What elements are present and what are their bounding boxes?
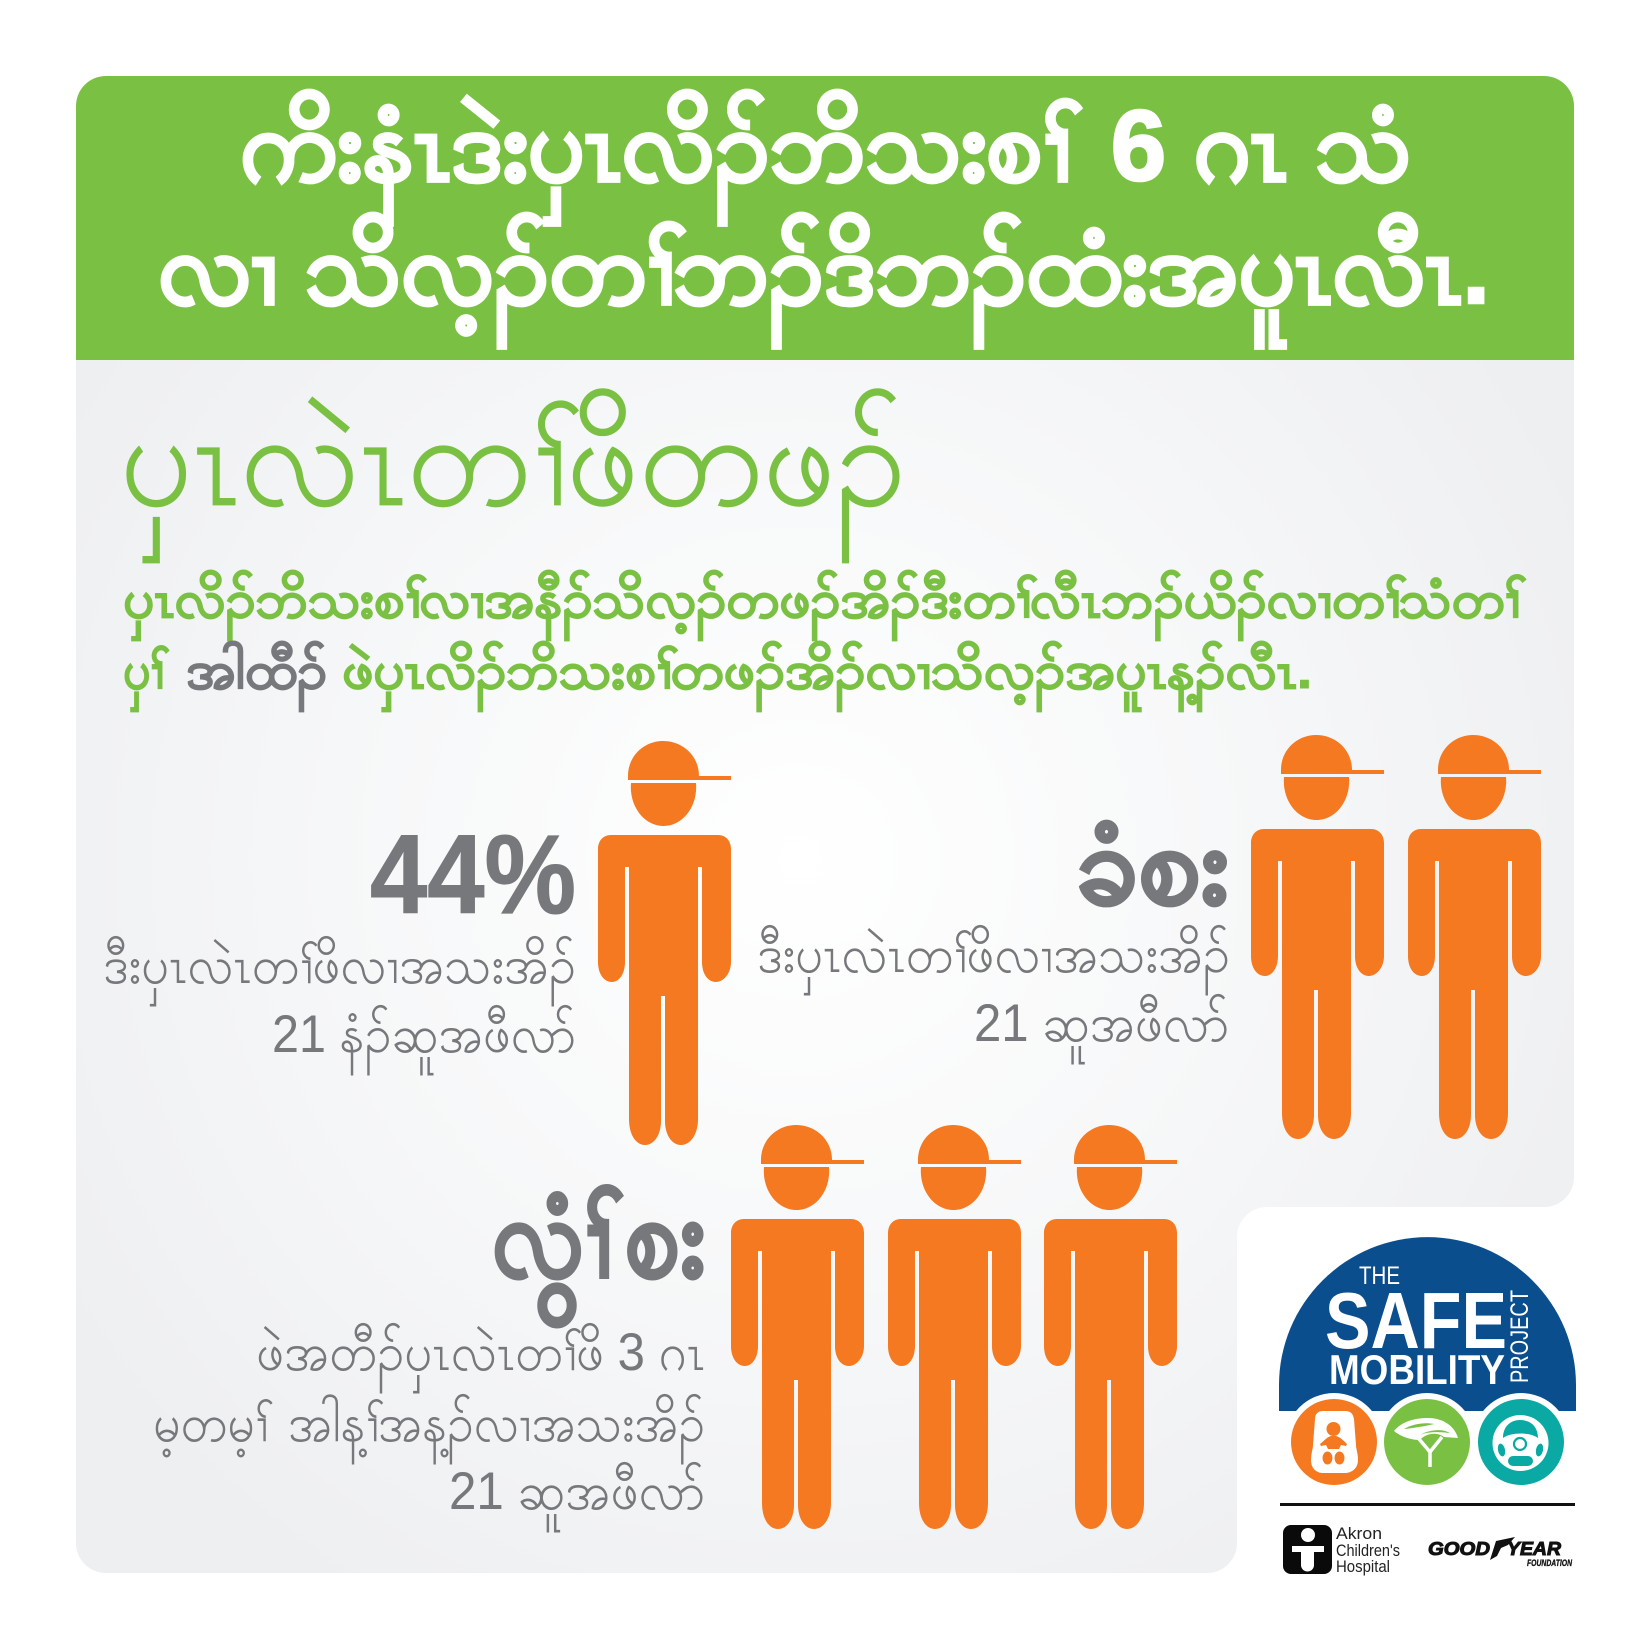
stat: double (757, 804, 1230, 1065)
text block: intro paragraph: ပှၢ် (123, 642, 170, 712)
heading: passengers: ပှၤလဲၤတၢ်ဖိတဖၣ် (120, 386, 906, 563)
panel: grey background (76, 360, 1574, 1573)
logo: Akron Children's Hospital: Akron (1336, 1524, 1382, 1543)
logo: The Safe Mobility Project (1279, 1237, 1576, 1576)
stat: quadruple (153, 1174, 705, 1533)
stat: quadruple: 21 ဆူအဖီလာ် (449, 1462, 705, 1533)
logo: The Safe Mobility Project: SAFE (1325, 1276, 1507, 1365)
logo: The Safe Mobility Project: MOBILITY (1329, 1346, 1505, 1393)
logo: Akron Children's Hospital: Hospital (1336, 1557, 1390, 1576)
stat: quadruple: လွံၢ်စး (492, 1174, 705, 1328)
icon: bike helmet (1378, 1393, 1476, 1491)
icon: steering wheel (1472, 1393, 1570, 1491)
stat: quadruple: မ့တမ့ၢ် အါန့ၢ်အန့ၣ်လၢအသးအိၣ် (153, 1394, 705, 1465)
logo: Goodyear Foundation: YEAR (1507, 1539, 1561, 1559)
stat: double: 21 ဆူအဖီလာ် (974, 994, 1229, 1065)
icon: three people (731, 1125, 1177, 1529)
stat: 44 percent: ဒီးပှၤလဲၤတၢ်ဖိလၢအသးအိၣ် (103, 936, 576, 1007)
text block: intro paragraph: ဖဲပှၤလိၣ်ဘိသးစၢ်တဖၣ်အိၣ်လၢသိလ့ၣ်အပူၤန့ၣ်လီၤ. (342, 641, 1312, 712)
logo: The Safe Mobility Project: PROJECT (1506, 1290, 1534, 1383)
logo: Goodyear Foundation (1428, 1537, 1573, 1569)
stat: quadruple: ဖဲအတီၣ်ပှၤလဲၤတၢ်ဖိ 3 ဂၤ (256, 1323, 705, 1394)
stat: double: ဒီးပှၤလဲၤတၢ်ဖိလၢအသးအိၣ် (757, 925, 1230, 996)
logo: Akron Children's Hospital: Children's (1336, 1541, 1400, 1560)
logo: Goodyear Foundation: FOUNDATION (1527, 1558, 1573, 1569)
logo: The Safe Mobility Project: THE (1359, 1262, 1400, 1290)
text block: intro paragraph: အါထီၣ် (186, 641, 327, 712)
text block: intro paragraph (123, 570, 1527, 712)
title line 1: ကိးနံၤဒဲးပှၤလိၣ်ဘိသးစၢ် 6 ဂၤ သံ (240, 89, 1411, 226)
text block: intro paragraph: ပှၤလိၣ်ဘိသးစၢ်လၢအနီၣ်သိလ့ၣ်တဖၣ်အိၣ်ဒီးတၢ် လီၤဘၣ်ယိၣ်လၢတၢ်သံတၢ် (123, 570, 1527, 641)
icon: two people (1251, 735, 1541, 1139)
logo: Akron Children's Hospital (1283, 1524, 1400, 1576)
stat: double: ခံစး (1076, 804, 1229, 927)
stat: 44 percent: 44% (370, 812, 576, 937)
logo: Goodyear Foundation: GOOD (1428, 1539, 1490, 1559)
title line 2: လၢ သိလ့ၣ်တၢ်ဘၣ်ဒိဘၣ်ထံးအပူၤလီၤ. (158, 212, 1490, 349)
stat: 44 percent: 21 နံၣ်ဆူအဖီလာ် (272, 1005, 576, 1076)
icon: one person (598, 741, 731, 1145)
icon: car seat (1285, 1393, 1383, 1491)
stat: 44 percent (103, 812, 576, 1076)
panel: green header (76, 76, 1574, 360)
